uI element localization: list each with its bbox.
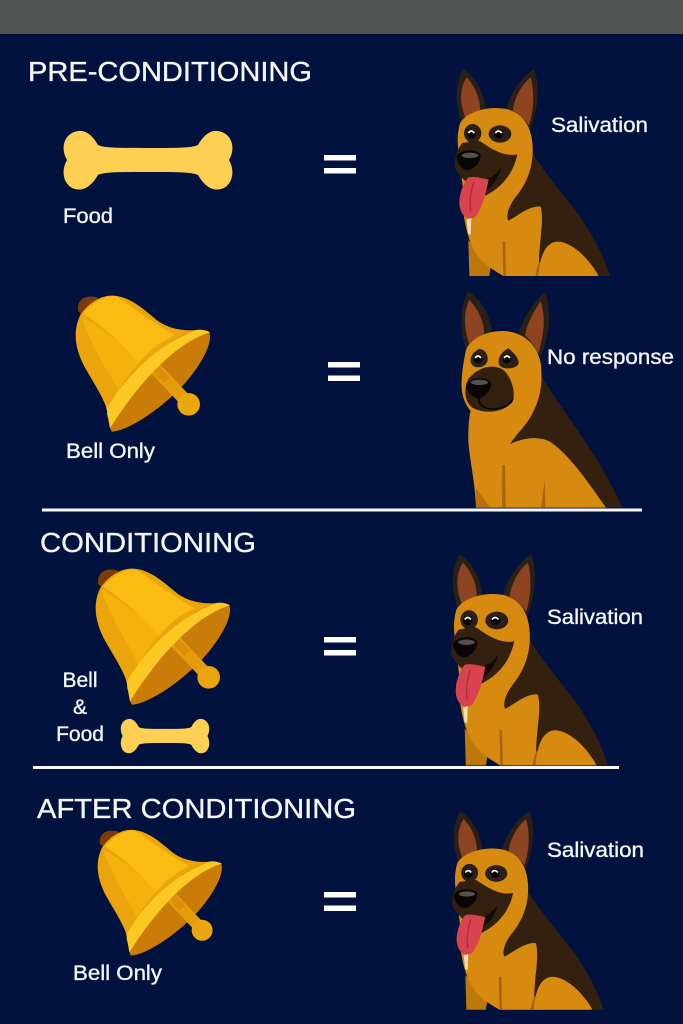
icon: bell only	[76, 296, 210, 432]
icon: neutral dog	[461, 292, 623, 508]
label: no response: No response	[547, 346, 674, 369]
label: salivation 2: Salivation	[547, 606, 643, 629]
divider line	[42, 508, 642, 512]
icon: salivating dog 1	[455, 69, 610, 276]
label: salivation 3: Salivation	[547, 839, 644, 862]
equals sign: bell row	[328, 362, 360, 381]
label: salivation 1: Salivation	[551, 114, 648, 137]
heading: pre-conditioning: PRE-CONDITIONING	[28, 56, 312, 87]
equals sign: conditioning row	[324, 637, 356, 656]
label: bell only after: Bell Only	[73, 962, 163, 985]
icon: salivating dog 2	[451, 555, 608, 765]
label: bell and food: Bell	[62, 669, 98, 692]
icon: salivating dog 3	[452, 811, 604, 1010]
divider line	[33, 766, 619, 769]
icon: bell with food	[96, 569, 230, 705]
heading: conditioning: CONDITIONING	[40, 527, 256, 558]
icon: bell after conditioning	[98, 830, 222, 956]
equals sign: after row	[324, 892, 356, 911]
equals sign: food row	[324, 155, 356, 174]
label: bell and food: Food	[56, 723, 104, 746]
label: bell and food: &	[73, 696, 87, 719]
icon: bone (food)	[64, 131, 232, 190]
icon: small bone	[121, 719, 209, 753]
label: food: Food	[63, 205, 113, 228]
top gray bar	[0, 0, 683, 34]
label: bell only: Bell Only	[66, 440, 156, 463]
heading: after conditioning: AFTER CONDITIONING	[37, 793, 356, 824]
label: bell and food	[56, 669, 104, 746]
